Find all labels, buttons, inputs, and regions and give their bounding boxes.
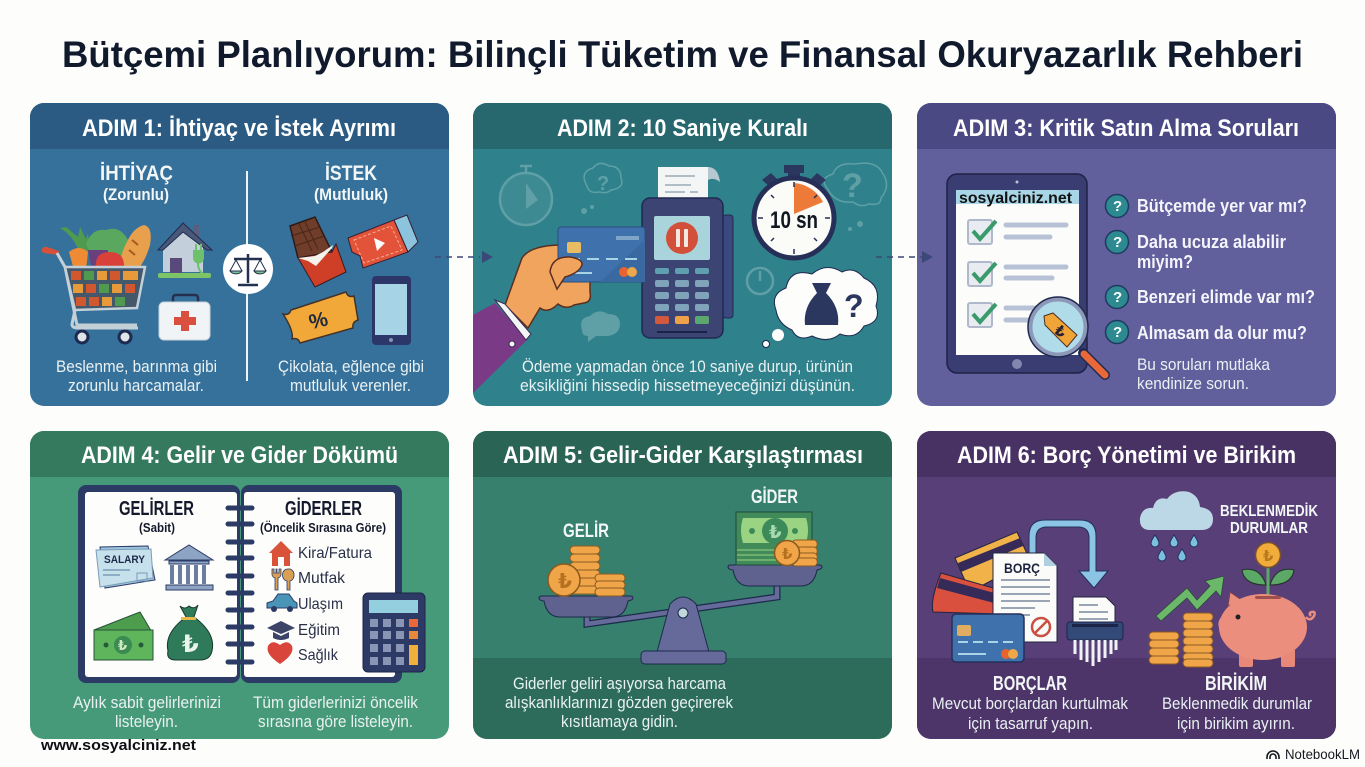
list: questions: Bütçemde yer var mı? xyxy=(1137,196,1307,216)
panel: adım 5 xyxy=(473,431,892,739)
text: ulaşım: Ulaşım xyxy=(298,596,343,613)
icon: receipt xyxy=(658,167,720,208)
text: adım 5 caption xyxy=(505,674,733,731)
text: istek caption: mutluluk verenler. xyxy=(290,376,411,395)
list: questions: ? xyxy=(1113,198,1122,215)
icon: thought cloud: ? xyxy=(844,288,864,324)
icon: first aid kit xyxy=(159,295,210,340)
notebook rings xyxy=(228,508,252,662)
icon: ticket xyxy=(348,215,418,268)
list: questions: ? xyxy=(1113,289,1122,306)
icon: cash and coins right xyxy=(736,512,817,566)
text: borçlar caption: BORÇLAR xyxy=(993,673,1067,695)
text: ihtiyaç caption: Beslenme, barınma gibi xyxy=(56,357,217,376)
text: adım 5 caption: alışkanlıklarınızı gözden geçirerek xyxy=(505,693,733,712)
icon: tablet checklist xyxy=(947,174,1105,375)
icon: cash xyxy=(94,612,153,660)
subheading: ihtiyaç: (Zorunlu) xyxy=(103,185,169,204)
icon: calculator xyxy=(363,593,425,672)
icon: discount coupon xyxy=(283,292,358,343)
heading: adım 4: ADIM 4: Gelir ve Gider Dökümü xyxy=(81,442,398,469)
icon: cutlery xyxy=(272,569,294,590)
text: adım 3 caption: kendinize sorun. xyxy=(1137,374,1249,393)
chart: balance scale xyxy=(539,512,822,664)
subheading: ihtiyaç: İHTİYAÇ xyxy=(100,162,173,185)
notebook xyxy=(78,485,402,683)
subheading: ihtiyaç xyxy=(100,162,173,204)
text: adım 2 caption: eksikliğini hissedip hissetmeyeceğinizi düşünün. xyxy=(520,376,855,395)
text: tablet url: sosyalciniz.net xyxy=(959,190,1073,207)
icon: money bag: ₺ xyxy=(182,631,199,658)
icon: cash and coins right: ₺ xyxy=(782,546,793,563)
arrow: adım 1 to 2 xyxy=(435,251,493,263)
label: beklenmedik durumlar xyxy=(1220,502,1318,537)
text: borçlar caption: Mevcut borçlardan kurtulmak xyxy=(932,694,1128,713)
label: gider: GİDER xyxy=(751,487,798,508)
panel: adım 3 xyxy=(917,103,1336,406)
icon: bank xyxy=(165,545,213,590)
icon: stopwatch 10 sn xyxy=(754,165,834,258)
icon: coins left xyxy=(548,546,625,596)
panel: adım 1 xyxy=(30,103,449,406)
icon: credit cards and debt document xyxy=(932,532,1057,662)
icon: piggy bank with sprout: ₺ xyxy=(1263,548,1274,565)
icon: salary slip xyxy=(96,546,155,588)
icon: car xyxy=(267,594,297,612)
panel: adım 6 xyxy=(917,431,1336,739)
text: gelir caption: listeleyin. xyxy=(115,712,178,731)
text: birikim caption: Beklenmedik durumlar xyxy=(1162,694,1312,713)
text: gelir caption: Aylık sabit gelirlerinizi xyxy=(73,693,221,712)
text: borçlar caption: için tasarruf yapın. xyxy=(968,714,1093,733)
icon: cash and coins right: ₺ xyxy=(769,522,782,542)
label: gelir: GELİR xyxy=(563,521,609,542)
icon: shopping cart xyxy=(42,225,151,343)
icon: credit cards and debt document: BORÇ xyxy=(1004,560,1040,576)
icon: home xyxy=(269,541,293,566)
heading: adım 2: ADIM 2: 10 Saniye Kuralı xyxy=(557,115,808,142)
text: birikim caption: BİRİKİM xyxy=(1205,672,1267,695)
text: istek caption xyxy=(278,357,424,395)
icon: smartphone xyxy=(372,276,411,345)
panel: adım 4 xyxy=(30,431,449,739)
text: adım 5 caption: kısıtlamaya gidin. xyxy=(561,712,678,731)
text: giderler heading xyxy=(260,497,386,535)
list: questions: Almasam da olur mu? xyxy=(1137,323,1307,343)
icon: stopwatch 10 sn: 10 sn xyxy=(770,207,818,234)
text: gelirler heading: (Sabit) xyxy=(139,520,175,535)
heading: adım 5: ADIM 5: Gelir-Gider Karşılaştırması xyxy=(503,442,863,469)
text: gelirler heading: GELİRLER xyxy=(119,497,194,520)
text: adım 3 caption xyxy=(1137,355,1270,393)
icon: rain cloud xyxy=(1140,491,1213,561)
list: questions: Daha ucuza alabilir xyxy=(1137,232,1286,252)
expense list xyxy=(267,541,372,664)
list: questions xyxy=(1106,194,1315,344)
text: adım 2 caption: Ödeme yapmadan önce 10 saniye durup, ürünün xyxy=(522,357,853,376)
arrow: adım 2 to 3 xyxy=(876,251,933,263)
list: questions: miyim? xyxy=(1137,252,1193,272)
decorative ghost icons: ? xyxy=(597,173,609,195)
text: adım 5 caption: Giderler geliri aşıyorsa harcama xyxy=(513,674,726,693)
list: questions: Benzeri elimde var mı? xyxy=(1137,287,1315,307)
heading: adım 1: ADIM 1: İhtiyaç ve İstek Ayrımı xyxy=(82,115,396,142)
icon: salary slip: SALARY xyxy=(104,554,146,566)
icon: cash: ₺ xyxy=(118,638,127,653)
label: beklenmedik durumlar: DURUMLAR xyxy=(1230,520,1308,537)
text: gelirler heading xyxy=(119,497,194,535)
icon: thought cloud xyxy=(762,267,878,348)
icon: hand with card xyxy=(473,227,645,393)
text: sağlık: Sağlık xyxy=(298,647,339,664)
icon: heart xyxy=(268,642,292,664)
icon: balance scale xyxy=(223,244,273,294)
icon: money bag xyxy=(167,605,213,660)
icon: piggy bank with sprout xyxy=(1218,542,1315,667)
icon: magnifier with price tag xyxy=(1028,297,1105,375)
text: adım 2 caption xyxy=(520,357,855,395)
text: gelir caption xyxy=(73,693,221,731)
text: kira/fatura: Kira/Fatura xyxy=(298,545,372,562)
list: questions: ? xyxy=(1113,324,1122,341)
text: gider caption xyxy=(253,693,418,731)
text: birikim caption xyxy=(1162,672,1312,733)
divider xyxy=(246,171,248,381)
decorative ghost icons: ? xyxy=(842,167,863,205)
heading: adım 3: ADIM 3: Kritik Satın Alma Soruları xyxy=(953,115,1299,142)
decorative ghost icons xyxy=(500,163,887,342)
text: gider caption: sırasına göre listeleyin. xyxy=(258,712,413,731)
heading: adım 6: ADIM 6: Borç Yönetimi ve Birikim xyxy=(957,442,1296,469)
icon: house xyxy=(158,223,212,278)
text: giderler heading: (Öncelik Sırasına Göre) xyxy=(260,520,386,535)
icon: discount coupon: % xyxy=(307,307,331,334)
text: istek caption: Çikolata, eğlence gibi xyxy=(278,357,424,376)
text: mutfak: Mutfak xyxy=(298,570,346,587)
icon: magnifier with price tag: ₺ xyxy=(1051,322,1070,342)
text: eğitim: Eğitim xyxy=(298,622,340,639)
subheading: istek: İSTEK xyxy=(325,162,377,185)
text: birikim caption: için birikim ayırın. xyxy=(1177,714,1295,733)
title: Bütçemi Planlıyorum: Bilinçli Tüketim ve Finansal Okuryazarlık Rehberi xyxy=(62,34,1303,75)
text: gider caption: Tüm giderlerinizi öncelik xyxy=(253,693,418,712)
subheading: istek xyxy=(314,162,388,204)
icon: coins stacks xyxy=(1149,613,1213,667)
text: giderler heading: GİDERLER xyxy=(285,497,362,520)
icon: payment terminal xyxy=(642,198,733,338)
list: questions: ? xyxy=(1113,234,1122,251)
text: ihtiyaç caption xyxy=(56,357,217,395)
icon: chocolate xyxy=(290,217,346,287)
text: adım 3 caption: Bu soruları mutlaka xyxy=(1137,355,1270,374)
icon: shredder xyxy=(1067,597,1123,666)
arrow: debt to shredder xyxy=(1029,520,1108,588)
watermark: website: www.sosyalciniz.net xyxy=(40,737,196,754)
icon: graduation cap xyxy=(267,621,295,640)
text: ihtiyaç caption: zorunlu harcamalar. xyxy=(68,376,204,395)
icon: growth arrow xyxy=(1156,576,1224,621)
text: borçlar caption xyxy=(932,673,1128,733)
panel: adım 2 xyxy=(473,103,892,406)
subheading: istek: (Mutluluk) xyxy=(314,185,388,204)
icon: coins left: ₺ xyxy=(558,571,572,593)
watermark: notebooklm: NotebookLM xyxy=(1285,746,1360,762)
label: beklenmedik durumlar: BEKLENMEDİK xyxy=(1220,502,1318,520)
